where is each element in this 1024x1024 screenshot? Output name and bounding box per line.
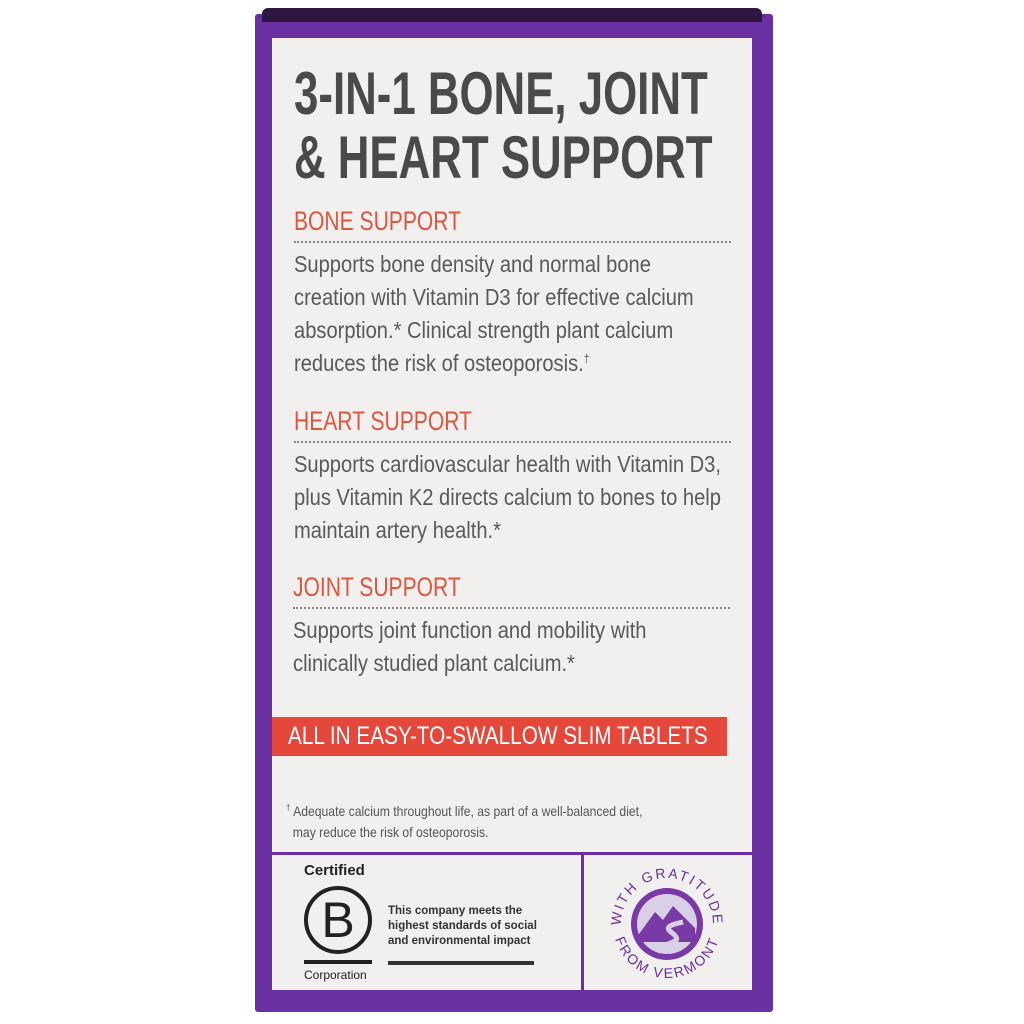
section: heart support: maintain artery health.*: [294, 517, 501, 543]
section: joint support: clinically studied plant calcium.*: [293, 650, 575, 676]
title: [294, 60, 713, 191]
b corp logo: Corporation: [304, 968, 367, 982]
section: bone support: BONE SUPPORT: [294, 206, 461, 236]
section: bone support: reduces the risk of osteoporosis.†: [294, 350, 590, 376]
section: heart support: [294, 406, 731, 543]
vermont seal: WITH GRATITUDE: [610, 868, 723, 924]
top flap shadow: [262, 8, 762, 22]
banner: ALL IN EASY-TO-SWALLOW SLIM TABLETS: [288, 722, 708, 750]
section: joint support: JOINT SUPPORT: [293, 572, 461, 602]
inner white panel: [272, 38, 752, 990]
section: bone support: creation with Vitamin D3 for effective calcium: [294, 284, 694, 310]
section: joint support: [293, 572, 730, 676]
section: heart support: Supports cardiovascular health with Vitamin D3,: [294, 451, 721, 477]
footnote: [286, 802, 642, 840]
box: purple package: [255, 14, 773, 1012]
section: bone support: [294, 206, 731, 376]
vermont seal: FROM VERMONT: [615, 936, 717, 978]
footnote: may reduce the risk of osteoporosis.: [293, 824, 488, 840]
footer divider lines: [272, 852, 752, 855]
b corp logo: B: [321, 892, 355, 948]
b corp logo: highest standards of social: [388, 920, 537, 932]
b corp logo: and environmental impact: [388, 935, 531, 947]
footnote: † Adequate calcium throughout life, as part of a well-balanced diet,: [286, 802, 642, 819]
b corp logo: [304, 862, 537, 982]
section: heart support: HEART SUPPORT: [294, 406, 472, 436]
section: joint support: Supports joint function and mobility with: [293, 617, 646, 643]
title: 3-IN-1 BONE, JOINT: [294, 60, 708, 127]
section: heart support: plus Vitamin K2 directs calcium to bones to help: [294, 484, 721, 510]
vermont seal: [610, 868, 723, 978]
section: bone support: absorption.* Clinical strength plant calcium: [294, 317, 673, 343]
b corp logo: This company meets the: [388, 905, 522, 917]
b corp logo: Certified: [304, 862, 365, 879]
title: & HEART SUPPORT: [294, 124, 713, 191]
banner: [272, 717, 727, 756]
section: bone support: Supports bone density and normal bone: [294, 251, 651, 277]
